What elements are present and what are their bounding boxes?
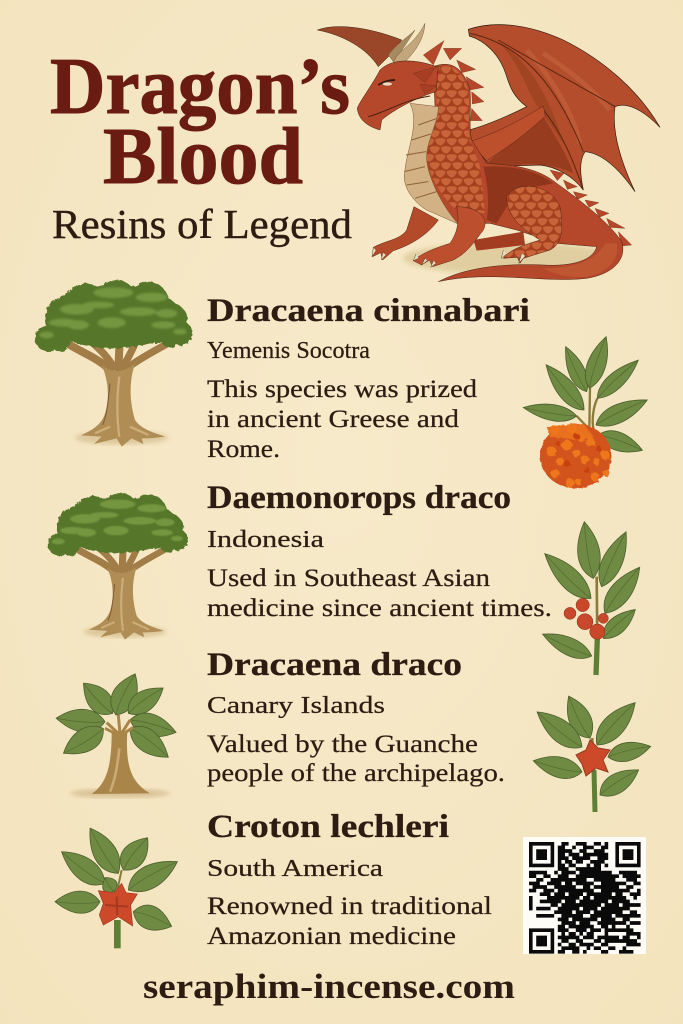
- tree: Dracaena draco: [55, 669, 179, 798]
- subtitle: Resins of Legend: [52, 201, 352, 247]
- plant: red blossom sprig: [530, 691, 653, 812]
- species: Dracaena draco: Valued by the Guanche: [207, 729, 478, 758]
- back spikes: [423, 41, 632, 246]
- species: Daemonorops draco: Daemonorops draco: [207, 480, 511, 516]
- species: Dracaena cinnabari: Yemenis Socotra: [207, 337, 370, 364]
- plant: red star flower sprig: [55, 822, 183, 948]
- species: Daemonorops draco: medicine since ancient times.: [207, 593, 552, 622]
- belly plates: [404, 103, 458, 224]
- species: Daemonorops draco: [207, 480, 552, 622]
- species: Croton lechleri: Renowned in traditional: [207, 891, 492, 920]
- species: Dracaena cinnabari: This species was prized: [207, 374, 477, 403]
- website footer: seraphim-incense.com: [143, 967, 515, 1006]
- species: Croton lechleri: Croton lechleri: [207, 809, 449, 845]
- far wing: [317, 27, 402, 67]
- claws: [372, 247, 525, 267]
- plant: red berry sprig: [537, 520, 648, 675]
- species: Dracaena cinnabari: Dracaena cinnabari: [207, 293, 530, 329]
- species: Dracaena draco: Canary Islands: [207, 692, 385, 719]
- species: Dracaena cinnabari: [207, 293, 530, 463]
- species: Dracaena draco: Dracaena draco: [207, 647, 462, 683]
- scales on neck: [427, 65, 485, 213]
- front leg: [413, 207, 485, 267]
- species: Daemonorops draco: Used in Southeast Asian: [207, 563, 490, 592]
- tree: Daemonorops draco: [48, 493, 188, 640]
- title: Blood: [103, 113, 303, 201]
- far hind foot: [473, 232, 525, 251]
- species: Dracaena draco: people of the archipelago.: [207, 758, 505, 787]
- title: [50, 43, 350, 201]
- species: Dracaena cinnabari: Rome.: [207, 434, 280, 463]
- tree: Dracaena cinnabari: [35, 280, 193, 447]
- species: Daemonorops draco: Indonesia: [207, 526, 324, 553]
- plant: orange flower sprig: [522, 334, 651, 488]
- large wing: [468, 25, 660, 192]
- species: Croton lechleri: [207, 809, 492, 950]
- species: Croton lechleri: Amazonian medicine: [207, 921, 456, 950]
- species: Dracaena cinnabari: in ancient Greese and: [207, 404, 459, 433]
- species: Dracaena draco: [207, 647, 505, 787]
- title: Dragon’s: [50, 43, 350, 131]
- QR code: [523, 837, 646, 954]
- species: Croton lechleri: South America: [207, 855, 383, 882]
- far foreleg: [373, 207, 438, 260]
- illustration: red dragon: [317, 23, 660, 282]
- body and tail: [425, 64, 623, 282]
- hind leg: [503, 186, 562, 263]
- head: [357, 23, 438, 130]
